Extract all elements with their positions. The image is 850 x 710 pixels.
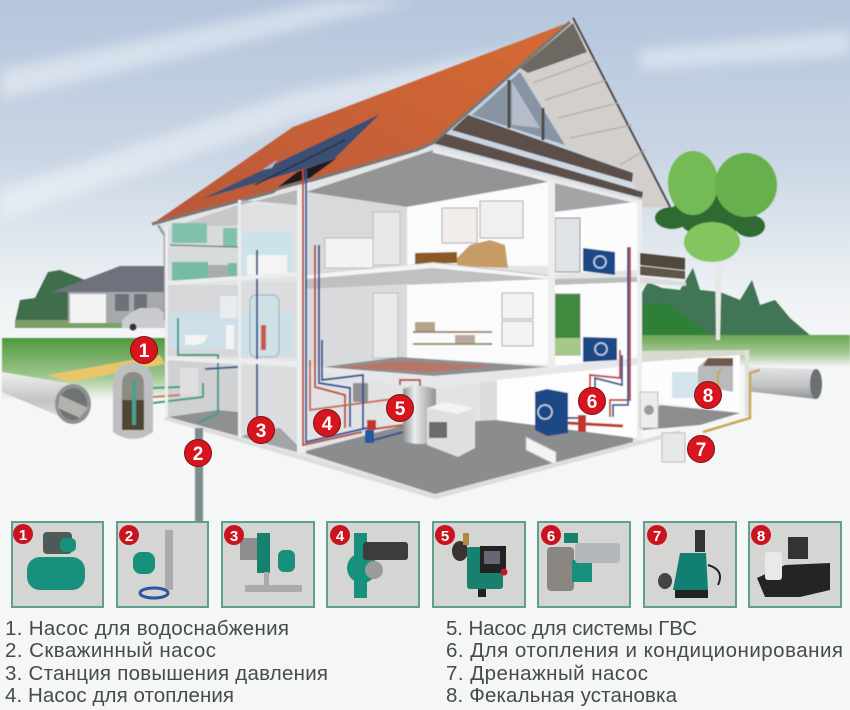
thumbnail 8 [749, 522, 841, 607]
numbered markers on house: 7 [696, 440, 706, 461]
numbered markers on house: 4 [322, 414, 333, 435]
left kitchen room [168, 223, 238, 282]
hot water tank [403, 386, 436, 444]
pictures [442, 208, 477, 243]
legend right column: 6. Для отопления и кондиционирования [446, 639, 843, 662]
middle bathroom with boiler [241, 282, 297, 358]
left sewer pipe [2, 372, 91, 424]
left lawn [2, 338, 167, 400]
thumbnail 3: 3 [230, 528, 238, 545]
thumbnail 7: 7 [653, 528, 661, 545]
right annex [640, 253, 749, 462]
gable window [472, 72, 565, 145]
left bathroom [168, 285, 238, 357]
upper slab [306, 262, 548, 289]
thumbnail 2 [117, 522, 208, 607]
upper middle room tiles [241, 205, 297, 276]
legend left column: 3. Станция повышения давления [5, 662, 328, 685]
green water pipes [153, 250, 257, 423]
numbered markers on house: 6 [587, 392, 597, 413]
well with pump [113, 363, 153, 439]
legend right column: 7. Дренажный насос [446, 662, 648, 685]
cooling unit [535, 389, 568, 436]
legend left column: 2. Скважинный насос [5, 639, 216, 662]
thumbnail 6: 6 [547, 528, 555, 545]
legend right column: 8. Фекальная установка [446, 684, 678, 707]
right grass and trees [640, 268, 850, 367]
thumbnail 5 [433, 522, 525, 607]
gable siding [520, 18, 670, 207]
numbered markers on house: 1 [139, 341, 150, 362]
tree [655, 151, 777, 340]
thumbnail 5: 5 [441, 528, 449, 545]
thumbnail 4: 4 [336, 528, 345, 545]
thumbnail 3 [222, 522, 314, 607]
thumbnail 7 [644, 522, 736, 607]
brown eaves [433, 115, 643, 198]
numbered markers on house: 3 [256, 421, 266, 442]
sofa and table [457, 240, 508, 268]
main room upper [306, 182, 548, 275]
thumbnail 1: 1 [19, 527, 27, 544]
basement left rooms [168, 360, 297, 452]
roof gutter [152, 22, 570, 224]
heated floor slab [323, 357, 633, 390]
legend left column: 1. Насос для водоснабжения [5, 617, 289, 640]
body fill [165, 145, 640, 497]
roofline white edge [433, 151, 640, 203]
right sewer pipe [745, 367, 822, 399]
thumbnail 1 [12, 522, 103, 607]
main room lower [306, 279, 548, 368]
house [152, 18, 760, 497]
numbered markers on house: 5 [395, 399, 406, 420]
solar collector [202, 114, 380, 199]
roof tiles [155, 22, 570, 222]
cooling pipes [568, 247, 630, 432]
structural walls [165, 180, 642, 453]
yellow drain pipe [703, 370, 760, 432]
ceilings [170, 150, 633, 232]
thumbnail 6 [538, 522, 630, 607]
thumbnail 8: 8 [757, 528, 765, 545]
pump thumbnails row [12, 522, 841, 607]
downpipe [158, 225, 165, 320]
legend right column: 5. Насос для системы ГВС [446, 617, 697, 640]
borehole pipe [195, 428, 203, 522]
legend left column [5, 617, 328, 707]
numbered markers on house: 2 [193, 444, 203, 465]
thumbnail 2: 2 [125, 528, 133, 545]
radiator [325, 238, 373, 268]
AC units [583, 248, 615, 275]
thumbnail 4 [327, 522, 419, 607]
numbered markers on house: 8 [703, 386, 713, 407]
legend left column: 4. Насос для отопления [5, 684, 234, 707]
background neighbour house and car [15, 266, 165, 330]
exterior front edge [165, 418, 680, 497]
floor [302, 420, 633, 494]
road strips [48, 355, 165, 382]
numbered markers on house [130, 336, 722, 466]
boiler [427, 402, 475, 457]
heating pipes [303, 170, 420, 445]
legend right column [446, 617, 843, 707]
ground floor back wall [306, 365, 637, 452]
right rooms [555, 202, 637, 366]
